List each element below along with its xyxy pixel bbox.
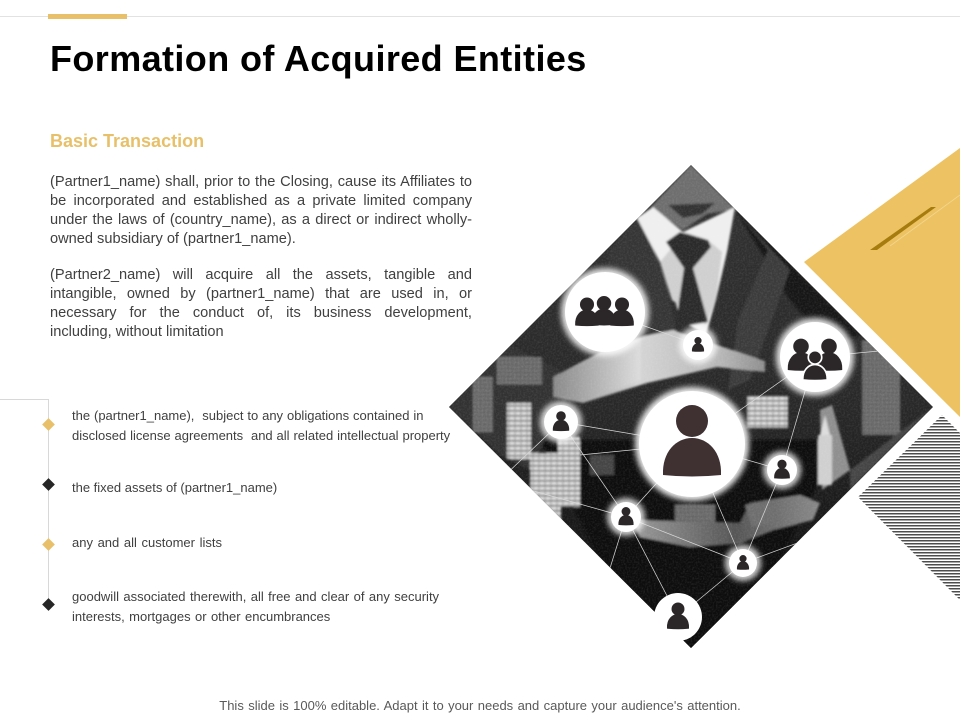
paragraph 2: necessary for the conduct of, its business development,: [50, 305, 472, 321]
marker 3: [42, 538, 54, 550]
paragraph 1: (Partner1_name) shall, prior to the Closing, cause its Affiliates to: [50, 174, 472, 190]
list item 4: interests, mortgages or other encumbrances: [72, 609, 330, 624]
header rule: [0, 16, 960, 17]
lower hand: [633, 495, 820, 547]
diamond photo: [449, 165, 933, 650]
dark lower field: [540, 440, 840, 650]
decorative graphic: [449, 148, 960, 648]
network lines: [511, 325, 878, 602]
photo grain: [449, 165, 933, 648]
yellow triangle: [804, 148, 960, 417]
paragraph 2: intangible, owned by (partner1_name) that are used in, or: [50, 286, 472, 302]
marker 2: [42, 478, 54, 491]
white striped buildings: [507, 403, 531, 459]
node: right small: [763, 451, 801, 489]
paragraph 2: including, without limitation: [50, 324, 224, 340]
node: lower right: [725, 545, 761, 581]
header accent bar: [48, 14, 127, 19]
paragraph 2: [50, 267, 472, 340]
footer note: This slide is 100% editable. Adapt it to your needs and capture your audience's attention.: [219, 698, 741, 713]
node: lower left: [607, 498, 645, 536]
right city: [862, 340, 900, 435]
title: Formation of Acquired Entities: [50, 38, 587, 79]
paragraph 1: [50, 174, 472, 247]
paragraph 1: owned subsidiary of (partner1_name).: [50, 231, 296, 247]
node: top small: [679, 326, 717, 364]
yellow stripe highlight: [870, 207, 936, 250]
striped triangle: [858, 415, 960, 600]
paragraph 1: be incorporated and established as a private limited company: [50, 193, 472, 209]
node: central person: [635, 387, 749, 501]
list item 1: [72, 408, 450, 443]
marker 1: [42, 418, 54, 430]
node: bottom: [654, 593, 702, 641]
tie: [666, 232, 711, 328]
chin and neck: [651, 165, 735, 230]
list item 2: the fixed assets of (partner1_name): [72, 480, 277, 495]
marker 4: [42, 598, 54, 611]
paragraph 2: (Partner2_name) will acquire all the assets, tangible and: [50, 267, 472, 283]
upper hand: [553, 330, 765, 403]
node: three people: [561, 268, 649, 356]
list item 1: the (partner1_name), subject to any obligations contained in: [72, 408, 423, 423]
list item 3: any and all customer lists: [72, 535, 222, 550]
timeline connector: [0, 399, 49, 606]
list item 1: disclosed license agreements and all related intellectual property: [72, 428, 450, 443]
list item 4: goodwill associated therewith, all free and clear of any security: [72, 589, 439, 604]
subheading: Basic Transaction: [50, 131, 204, 151]
list item 4: [72, 589, 439, 624]
paragraph 1: under the laws of (country_name), as a direct or indirect wholly-: [50, 212, 472, 228]
right side dark shoulder: [735, 209, 860, 345]
gray left city: [449, 345, 560, 470]
jacket lapels: [624, 218, 678, 337]
shirt collar: [637, 207, 735, 335]
node: group: [776, 318, 854, 396]
node: left: [540, 401, 582, 443]
